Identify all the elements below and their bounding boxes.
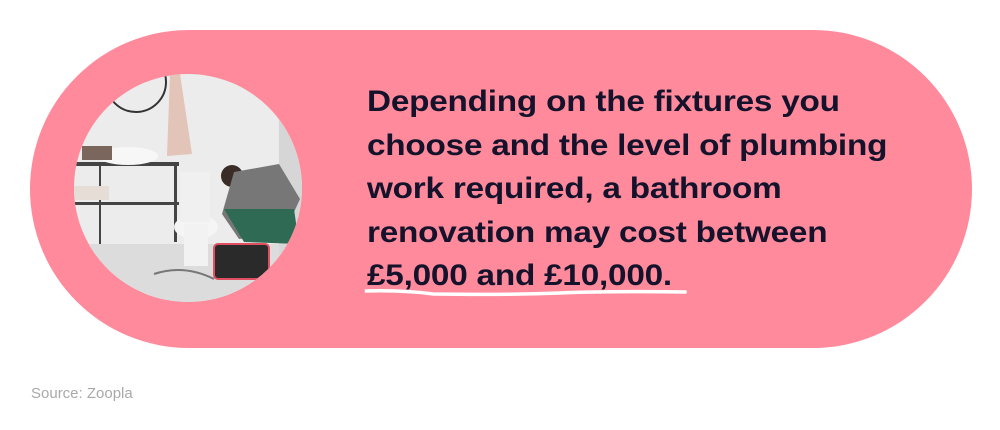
text block: main statement: . (663, 259, 672, 292)
text block: main statement: work required, a bathroom (367, 172, 781, 205)
photo: plumber in bathroom (74, 74, 302, 302)
text block: main statement: choose and the level of plumbing (367, 128, 887, 162)
text block: main statement: renovation may cost between (367, 216, 827, 248)
text block: main statement: £5,000 and £10,000 (367, 259, 663, 292)
text block: main statement: Depending on the fixtures you (367, 85, 840, 118)
underline: wavy white (364, 289, 687, 296)
panel: pill background (30, 30, 972, 348)
source note: Source: Zoopla (31, 385, 133, 402)
text block: main statement (364, 85, 887, 296)
